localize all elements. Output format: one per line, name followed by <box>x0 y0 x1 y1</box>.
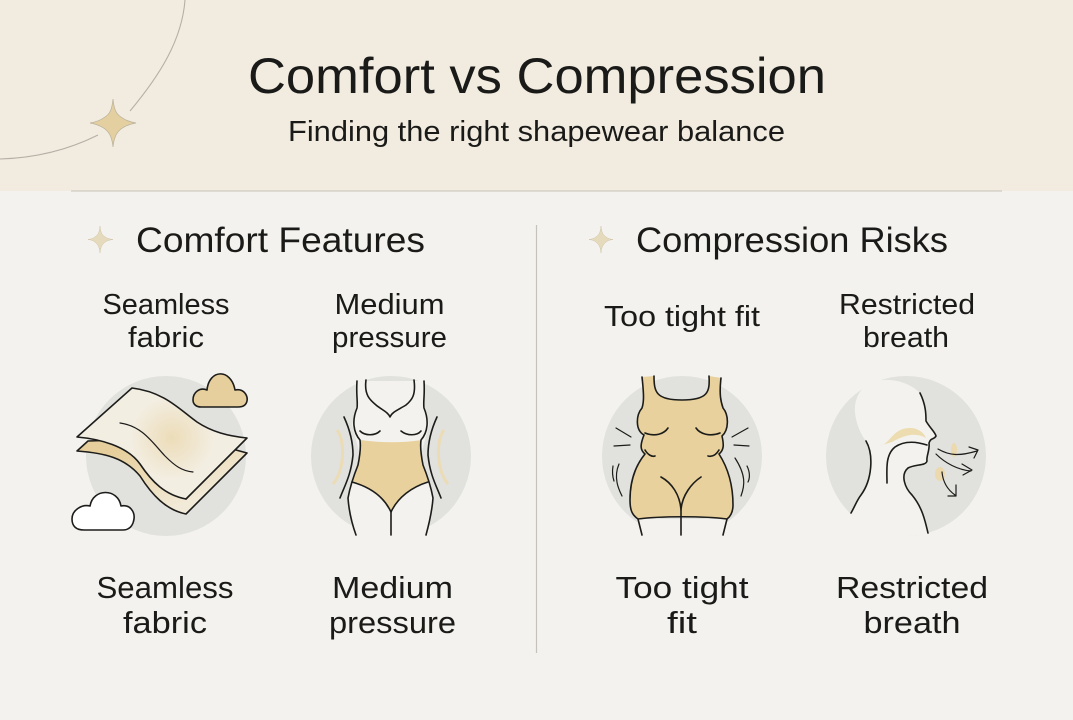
label: medium pressure bottom: Medium <box>332 570 453 605</box>
label: too tight fit bottom: Too tight <box>616 570 749 605</box>
label: restricted breath top: breath <box>863 322 949 354</box>
subtitle: Finding the right shapewear balance <box>288 116 785 148</box>
label: too tight fit bottom: fit <box>667 605 697 640</box>
icon: medium pressure body <box>311 376 471 537</box>
panel: compression risks <box>589 221 988 640</box>
icon: comfort sparkle <box>88 226 113 253</box>
header divider <box>71 190 1002 192</box>
label: seamless fabric top: fabric <box>128 322 204 354</box>
icon: layered fabric <box>72 374 247 536</box>
label: medium pressure top: pressure <box>332 322 447 354</box>
label: medium pressure top: Medium <box>334 289 444 321</box>
icon: restricted breath profile <box>826 376 986 536</box>
column divider <box>536 225 538 653</box>
icon: header sparkle <box>90 99 136 147</box>
label: seamless fabric bottom: Seamless <box>96 570 234 605</box>
label: seamless fabric top: Seamless <box>102 289 230 321</box>
label: seamless fabric bottom: fabric <box>123 605 207 640</box>
label: restricted breath bottom: breath <box>864 605 960 640</box>
panel: comfort features <box>72 221 471 640</box>
header band <box>0 0 1073 191</box>
icon: too tight body <box>602 376 762 537</box>
icon: risks sparkle <box>589 226 613 253</box>
label: restricted breath top: Restricted <box>839 289 975 321</box>
label: too tight fit top: Too tight fit <box>604 301 760 333</box>
heading: compression risks: Compression Risks <box>636 221 948 260</box>
title: Comfort vs Compression <box>248 48 826 104</box>
label: medium pressure bottom: pressure <box>329 605 456 640</box>
label: restricted breath bottom: Restricted <box>836 570 988 605</box>
heading: comfort features: Comfort Features <box>136 221 425 260</box>
